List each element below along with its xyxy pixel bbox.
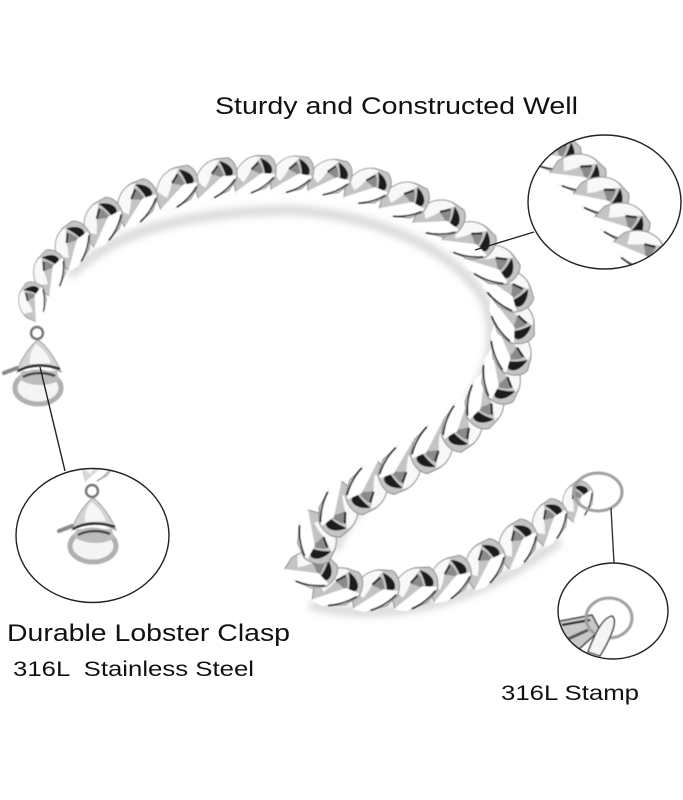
inset: chain detail [527,134,682,270]
lobster clasp [4,327,61,404]
end ring [574,473,622,511]
label: 316L stainless steel: 316L Stainless Steel [13,658,254,681]
connector: clasp to inset [40,367,65,471]
label: 316L stamp: 316L Stamp [501,682,639,705]
label: durable lobster clasp: Durable Lobster Clasp [7,620,290,647]
inset: clasp detail [16,452,169,602]
inset: stamp ring detail [555,563,668,659]
bracelet soft shadow [70,210,560,612]
connector: chain to inset [475,232,534,250]
curb chain bracelet [11,155,603,614]
connector: ring to inset [611,508,614,563]
title: sturdy and constructed well: Sturdy and Constructed Well [215,93,578,120]
